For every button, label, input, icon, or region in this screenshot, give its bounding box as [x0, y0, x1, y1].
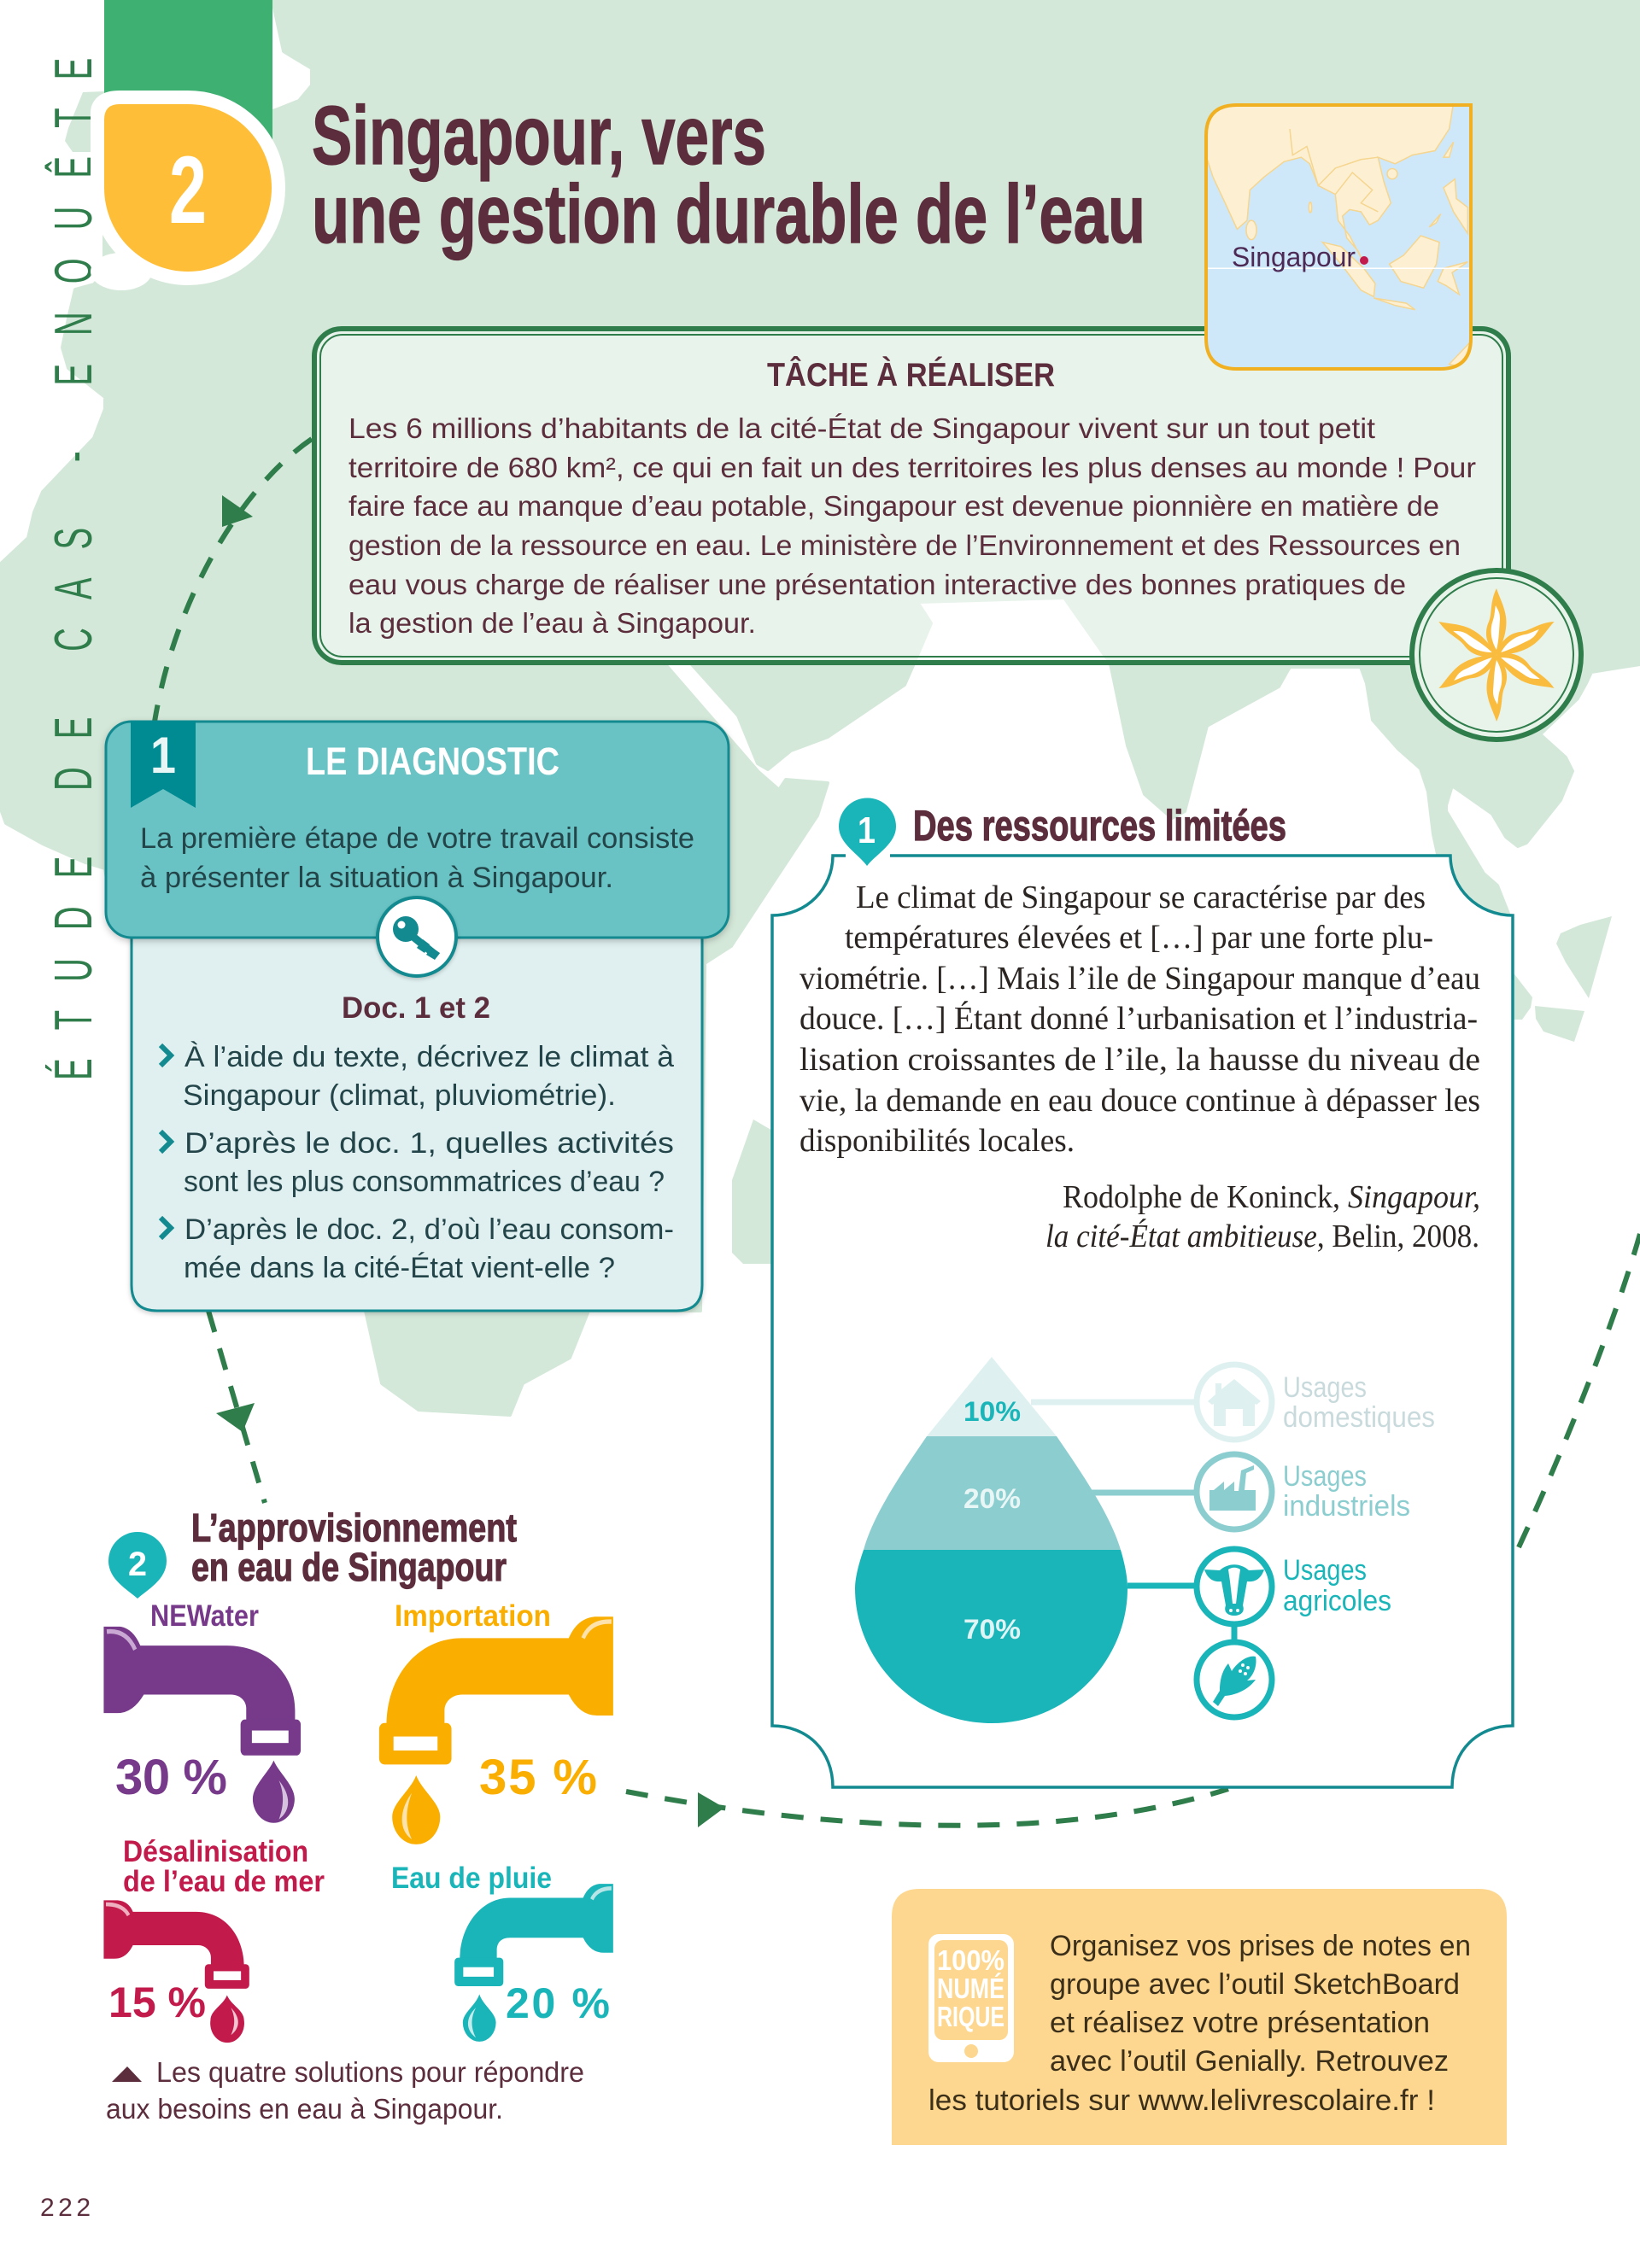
faucet: eau de pluie: [391, 1862, 613, 2042]
arrow: task to diagnostic: [155, 439, 312, 722]
question 3: [161, 1213, 674, 1284]
legend: domestic uses: [1031, 1365, 1435, 1440]
source: Rodolphe de Koninck, Singapour,: [1063, 1179, 1480, 1215]
document 1 number pin: 1: [858, 810, 876, 851]
panel: le diagnostic: [106, 721, 729, 1311]
quote text: températures élevées et […] par une forte plu-: [845, 920, 1433, 956]
20 percent: 20%: [964, 1483, 1021, 1514]
page number: 222: [40, 2194, 91, 2222]
note text: les tutoriels sur www.lelivrescolaire.fr !: [928, 2084, 1435, 2117]
quote text: disponibilités locales.: [800, 1123, 1075, 1159]
note text: [928, 1930, 1471, 2117]
side label: étude de cas - enquête: ÉTUDE DE CAS - ENQUÊTE: [44, 58, 102, 1080]
source: la cité-État ambitieuse, Belin, 2008.: [1046, 1219, 1479, 1254]
panel: document 1 frame: [772, 798, 1513, 1787]
locator map inset: [1206, 102, 1472, 369]
task text: eau vous charge de réaliser une présentation interactive des bonnes pratiques de: [348, 569, 1406, 600]
document 1 number pin: [839, 798, 896, 866]
quote text: vie, la demande en eau douce continue à dépasser les: [800, 1083, 1480, 1119]
document 1 heading: Des ressources limitées: [913, 802, 1286, 850]
numbered badge: [91, 104, 272, 290]
chart: water use drop: [855, 1357, 1128, 1723]
note text: groupe avec l’outil SketchBoard: [1050, 1968, 1460, 2001]
faucet: newater: NEWater: [150, 1599, 259, 1633]
title: [312, 89, 1145, 260]
arrow: diagnostic to supply chart: [208, 1311, 265, 1503]
document 2 number pin: 2: [128, 1546, 147, 1583]
arrow: supply chart to document 1: [626, 1789, 1228, 1827]
faucet: désalinisation: [103, 1835, 325, 2043]
question 2: sont les plus consommatrices d’eau ?: [184, 1166, 665, 1198]
background world map: [0, 0, 1640, 1415]
document 2 heading: [191, 1505, 517, 1589]
task text: gestion de la ressource en eau. Le ministère de l’Environnement et des Ressources en: [348, 529, 1461, 561]
10 percent: 10%: [964, 1396, 1021, 1427]
question 1: À l’aide du texte, décrivez le climat à: [184, 1041, 674, 1073]
icon: phone 100% numérique: RIQUE: [937, 2001, 1004, 2032]
intro text: La première étape de votre travail consiste: [140, 822, 694, 855]
icon: key: [378, 897, 456, 976]
question 3: D’après le doc. 2, d’où l’eau consom-: [184, 1213, 674, 1246]
quote text: lisation croissantes de l’ile, la hausse du niveau de: [800, 1042, 1480, 1078]
ribbon number: 1: [150, 727, 176, 784]
faucet: importation: Importation: [395, 1599, 551, 1633]
question 1: [161, 1041, 674, 1112]
legend: agricultural uses: Usages: [1283, 1554, 1367, 1587]
question 2: [161, 1127, 674, 1198]
legend: domestic uses: Usages: [1283, 1371, 1367, 1404]
legend: industrial uses: industriels: [1283, 1490, 1410, 1523]
icon: phone 100% numérique: 100%: [937, 1944, 1004, 1976]
panel: numérique note: [892, 1889, 1507, 2145]
caption: aux besoins en eau à Singapour.: [106, 2093, 503, 2125]
caption: Les quatre solutions pour répondre: [156, 2056, 584, 2088]
diagnostic heading: LE DIAGNOSTIC: [306, 739, 559, 783]
faucet: désalinisation: Désalinisation: [123, 1835, 308, 1868]
note text: avec l’outil Genially. Retrouvez: [1050, 2045, 1449, 2078]
legend: industrial uses: Usages: [1283, 1460, 1367, 1493]
faucet: newater: [103, 1599, 301, 1823]
task text: territoire de 680 km², ce qui en fait un des territoires les plus denses au monde ! Pour: [348, 452, 1476, 483]
icon: phone 100% numérique: [928, 1934, 1014, 2062]
faucet: importation: 35 %: [479, 1750, 597, 1805]
question 3: mée dans la cité-État vient-elle ?: [184, 1252, 615, 1284]
faucet: désalinisation: de l’eau de mer: [123, 1865, 325, 1898]
document 2 heading: L’approvisionnement: [191, 1505, 517, 1550]
icon: cow: [1204, 1564, 1264, 1616]
quote text: douce. […] Étant donné l’urbanisation et l’industria-: [800, 1001, 1478, 1037]
icon: star emblem: [1412, 570, 1581, 739]
legend: agricultural uses: [1128, 1549, 1391, 1644]
task text: faire face au manque d’eau potable, Singapour est devenue pionnière en matière de: [348, 490, 1439, 522]
diagnostic questions box: [132, 931, 702, 1311]
quote text: Le climat de Singapour se caractérise par des: [856, 880, 1426, 915]
task heading: TÂCHE À RÉALISER: [767, 356, 1055, 394]
faucet: newater: 30 %: [115, 1750, 227, 1805]
faucet: eau de pluie: 20 %: [506, 1979, 610, 2027]
note text: Organisez vos prises de notes en: [1050, 1930, 1471, 1962]
task text: [348, 412, 1476, 639]
quote text: [800, 880, 1480, 1159]
quote text: viométrie. […] Mais l’ile de Singapour manque d’eau: [800, 961, 1480, 997]
green top tab: [104, 0, 272, 145]
document 2 number pin: [108, 1532, 167, 1599]
source: [1046, 1179, 1480, 1254]
ribbon number: [131, 721, 196, 808]
question 1: Singapour (climat, pluviométrie).: [183, 1079, 616, 1112]
numbered badge: 2: [169, 137, 207, 243]
icon: phone 100% numérique: NUMÉ: [937, 1973, 1004, 2004]
note text: et réalisez votre présentation: [1050, 2007, 1430, 2039]
intro text: à présenter la situation à Singapour.: [140, 862, 613, 894]
doc reference: Doc. 1 et 2: [342, 991, 490, 1025]
faucet: désalinisation: 15 %: [108, 1979, 206, 2026]
title: Singapour, vers: [312, 89, 766, 182]
document 2 heading: en eau de Singapour: [191, 1545, 507, 1589]
singapore dot: [1360, 256, 1368, 265]
diagnostic header: [106, 721, 729, 938]
map label: Singapour: [1232, 242, 1356, 272]
legend: industrial uses: [1091, 1454, 1410, 1529]
title: une gestion durable de l’eau: [312, 167, 1145, 260]
panel: document 2 supply: [103, 1505, 613, 2125]
icon: corn: [1197, 1642, 1272, 1717]
faucet: eau de pluie: Eau de pluie: [391, 1862, 552, 1895]
task text: Les 6 millions d’habitants de la cité-État de Singapour vivent sur un tout petit: [348, 412, 1375, 444]
question 2: D’après le doc. 1, quelles activités: [184, 1127, 674, 1160]
caption: [106, 2056, 584, 2125]
faucet: importation: [379, 1599, 613, 1844]
task text: la gestion de l’eau à Singapour.: [348, 607, 756, 639]
intro text: [140, 822, 694, 894]
legend: domestic uses: domestiques: [1283, 1401, 1435, 1434]
arrow: document 1 onward: [1519, 1234, 1640, 1547]
legend: agricultural uses: agricoles: [1283, 1585, 1391, 1617]
70 percent: 70%: [964, 1614, 1021, 1645]
panel: tâche à réaliser: [314, 329, 1508, 663]
